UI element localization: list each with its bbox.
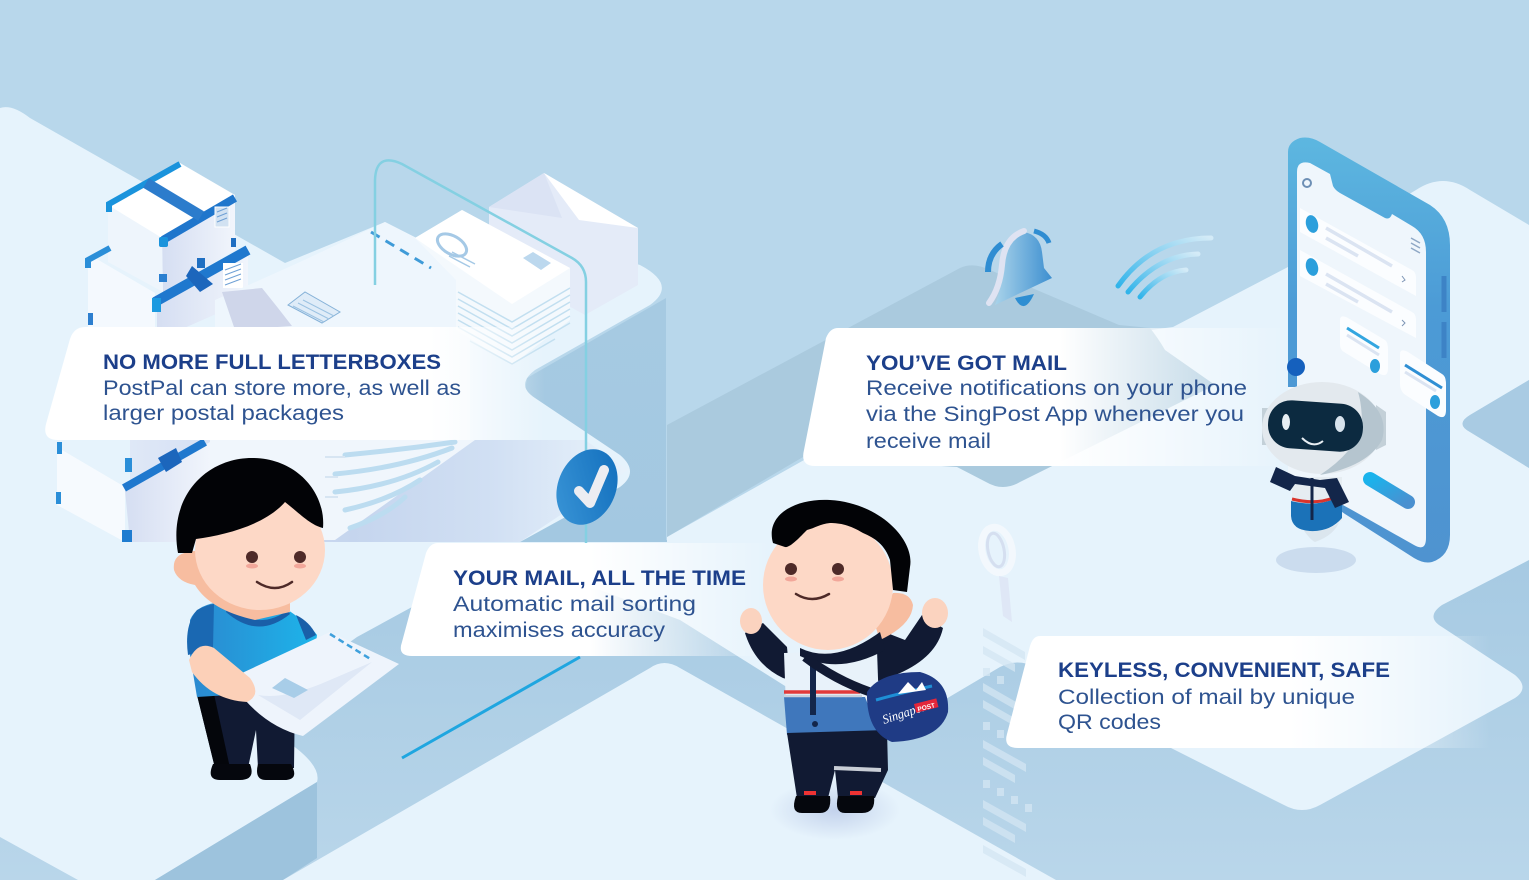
text: your mail all the time: YOUR MAIL, ALL THE TIME bbox=[453, 567, 746, 590]
face bbox=[763, 520, 893, 650]
text: keyless convenient safe: Collection of mail by unique bbox=[1058, 685, 1355, 709]
mail bag bbox=[867, 672, 948, 742]
bag strap bbox=[805, 657, 870, 692]
robot arms and collar bbox=[1270, 467, 1349, 508]
trousers bbox=[787, 730, 888, 798]
front envelope stack bbox=[415, 210, 570, 365]
icon: wifi signal bbox=[1118, 238, 1211, 297]
robot tail bbox=[1300, 520, 1340, 542]
callout backgrounds bbox=[45, 327, 1490, 748]
trousers bbox=[197, 690, 295, 768]
robot eyes bbox=[1282, 414, 1290, 430]
envelope lower folds bbox=[210, 440, 475, 540]
eyes and blush bbox=[246, 551, 306, 568]
right raised arm bbox=[865, 615, 943, 682]
postman mascot bbox=[740, 500, 948, 840]
eyes and blush bbox=[785, 563, 844, 582]
ear and neck shadow bbox=[174, 550, 290, 620]
package label bbox=[288, 292, 340, 323]
second parcel bbox=[88, 248, 248, 340]
text: you've got mail: Receive notifications on your phone bbox=[866, 376, 1247, 400]
text: keyless convenient safe bbox=[1058, 659, 1390, 734]
ground shadow bbox=[770, 780, 900, 840]
collar bbox=[800, 632, 885, 664]
shoes bbox=[794, 796, 874, 813]
robot red stripe bbox=[1292, 498, 1333, 502]
mail bag: Singapore bbox=[880, 697, 933, 727]
text: no more full letterboxes: PostPal can store more, as well as bbox=[103, 376, 461, 400]
hair bbox=[176, 458, 323, 553]
robot shadow bbox=[1276, 547, 1356, 573]
smart locker glass outline bbox=[375, 160, 586, 543]
lower centre platform bbox=[283, 663, 1056, 880]
text: keyless convenient safe: KEYLESS, CONVENIENT, SAFE bbox=[1058, 659, 1390, 682]
lower parcel bbox=[56, 442, 210, 542]
shirt bbox=[190, 603, 317, 697]
face bbox=[195, 490, 325, 610]
dashed seal bbox=[371, 232, 431, 268]
text: your mail all the time: maximises accuracy bbox=[453, 618, 665, 642]
robot second eye bbox=[1335, 416, 1345, 432]
hands bbox=[740, 598, 948, 634]
mail pile bbox=[210, 173, 638, 540]
trouser shading bbox=[197, 694, 230, 768]
hair bbox=[772, 500, 910, 592]
left platform side wall bbox=[500, 298, 666, 545]
icon: smartphone bbox=[1288, 138, 1450, 562]
right edge lozenge bbox=[1462, 380, 1529, 468]
callout 3 shape bbox=[803, 328, 1290, 466]
callout 2 shape bbox=[401, 543, 770, 656]
robot ears bbox=[1262, 405, 1386, 450]
robot visor bbox=[1266, 399, 1365, 453]
reply button bbox=[1370, 479, 1408, 502]
text: you've got mail: via the SingPost App whenever you bbox=[866, 402, 1244, 426]
phone side buttons bbox=[1442, 276, 1446, 358]
robot head bbox=[1262, 382, 1382, 474]
phone settings icon bbox=[1303, 179, 1311, 187]
robot antenna bbox=[1287, 358, 1305, 376]
text: keyless convenient safe: QR codes bbox=[1058, 710, 1161, 734]
left raised arm bbox=[745, 623, 790, 680]
text: you've got mail bbox=[866, 352, 1247, 453]
chat bubble one bbox=[1340, 316, 1388, 375]
shoes bbox=[211, 764, 294, 780]
notification card one bbox=[1300, 208, 1416, 296]
text: you've got mail: YOU’VE GOT MAIL bbox=[866, 352, 1067, 375]
top parcel bbox=[108, 163, 236, 292]
notification card two bbox=[1300, 250, 1416, 338]
robot jacket hem bbox=[1291, 499, 1342, 531]
mail container wall bbox=[130, 440, 628, 542]
phone menu icon bbox=[1411, 238, 1420, 253]
smile bbox=[257, 582, 292, 588]
lower mid-blue ground bbox=[0, 540, 1529, 880]
smile bbox=[796, 594, 829, 599]
text: you've got mail: receive mail bbox=[866, 429, 991, 453]
person with parcel bbox=[174, 458, 399, 780]
icon: bell bbox=[988, 231, 1052, 306]
text: no more full letterboxes bbox=[103, 351, 461, 425]
person platform side wall bbox=[155, 782, 317, 880]
jacket bbox=[784, 650, 880, 735]
padded envelopes bbox=[215, 222, 500, 440]
callout 4 shape bbox=[1006, 636, 1490, 748]
stack of parcels bbox=[56, 163, 248, 542]
callout 1 shape bbox=[45, 327, 545, 440]
ear bbox=[875, 593, 913, 640]
chat bubble two bbox=[1400, 350, 1446, 417]
icon: check badge bbox=[546, 440, 628, 534]
back envelope stack bbox=[489, 173, 638, 315]
arm bbox=[189, 646, 255, 702]
icon: key bbox=[978, 524, 1016, 622]
QR code pattern bbox=[983, 628, 1032, 877]
robot torso bbox=[1292, 477, 1342, 531]
robot mascot bbox=[1262, 358, 1386, 573]
mid-blue hill behind bell bbox=[667, 265, 1215, 537]
text: your mail all the time: Automatic mail sorting bbox=[453, 592, 696, 616]
text: your mail all the time bbox=[453, 567, 746, 642]
robot zip bbox=[1310, 478, 1314, 520]
text: no more full letterboxes: larger postal packages bbox=[103, 401, 344, 425]
parcel in hands bbox=[242, 632, 399, 736]
blue floor line bbox=[402, 657, 580, 758]
mail bag: POST bbox=[917, 702, 936, 713]
text: no more full letterboxes: NO MORE FULL LETTERBOXES bbox=[103, 351, 441, 374]
robot smile bbox=[1302, 438, 1323, 444]
robot head shading bbox=[1320, 392, 1384, 475]
